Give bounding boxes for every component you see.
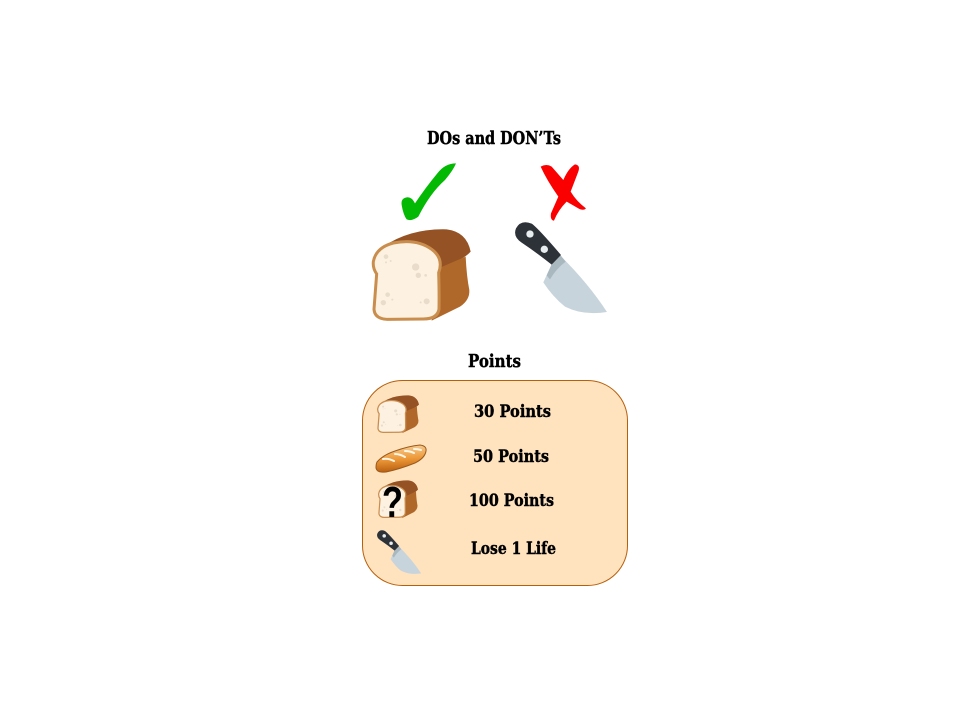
icon: red cross	[541, 164, 586, 221]
icon: large bread loaf	[373, 229, 471, 321]
icon: mystery bread	[379, 478, 418, 527]
icon: bread, 30 points	[378, 395, 419, 433]
title: DOs and DON'Ts: DOs and DON’Ts	[427, 128, 561, 149]
label: 50 Points: 50 Points	[473, 447, 549, 467]
label: 100 Points: 100 Points	[469, 491, 554, 511]
heading: Points: Points	[468, 351, 521, 372]
icon: baguette	[376, 445, 426, 472]
panel: points legend	[362, 380, 628, 586]
panel background	[362, 380, 628, 586]
icon: small knife	[377, 530, 421, 574]
icon: mystery bread: ?	[382, 478, 403, 527]
label: Lose 1 Life: Lose 1 Life	[471, 539, 556, 559]
label: 30 Points: 30 Points	[474, 402, 551, 422]
icon: green check mark	[402, 163, 456, 220]
icon: large knife	[515, 222, 607, 313]
